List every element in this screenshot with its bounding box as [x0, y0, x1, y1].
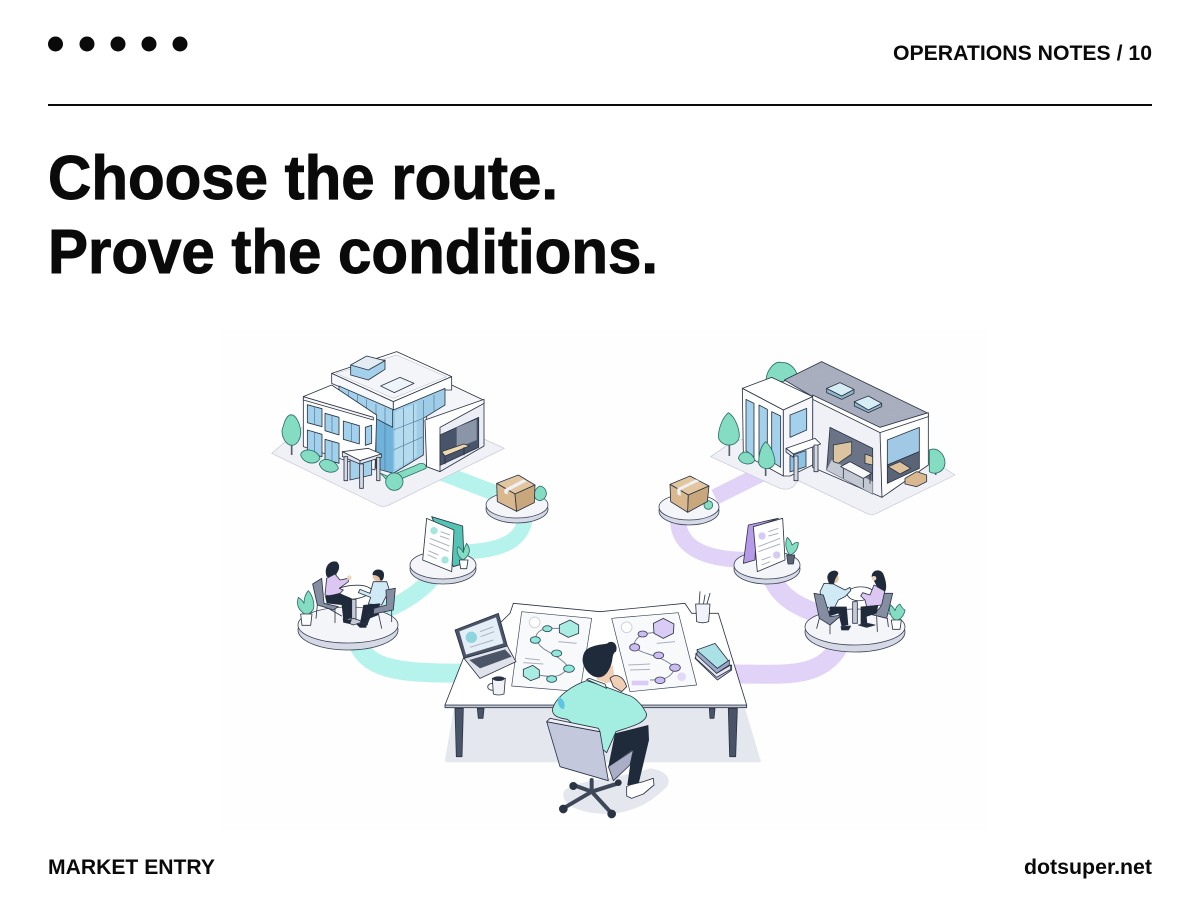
trees: [718, 413, 775, 476]
desk legs: [455, 708, 737, 757]
right shrub tree: [929, 449, 945, 475]
stacked books: [695, 643, 732, 680]
title: [48, 144, 658, 287]
sweater: [552, 681, 647, 753]
tree: [282, 415, 301, 455]
head: [597, 665, 615, 683]
footer label: right: dotsuper.net: [1024, 856, 1152, 879]
meeting: left table with two people: [297, 561, 395, 628]
footer label: left: MARKET ENTRY: [48, 856, 215, 879]
illustration: two market entry routes: [272, 352, 955, 818]
desk top: [445, 705, 747, 708]
office block: [742, 377, 813, 410]
coffee mug: [488, 676, 505, 695]
title: Choose the route.: [48, 144, 558, 213]
building: right warehouse: [711, 362, 955, 515]
platform: left meeting: [298, 607, 398, 650]
icon: left document stand: [423, 517, 469, 572]
trousers: [608, 725, 649, 785]
platform: right document: [734, 551, 800, 584]
table: [847, 587, 873, 623]
canopy: [786, 438, 821, 481]
icon: right document stand: [743, 518, 798, 572]
route: teal path: [356, 472, 526, 673]
title: Prove the conditions.: [48, 218, 658, 287]
pencil cup: [696, 592, 710, 623]
shrubs: [301, 450, 426, 490]
tree behind: [766, 362, 797, 382]
plant: [890, 604, 905, 629]
icon: five header dots: [48, 36, 188, 52]
header label: OPERATIONS NOTES / 10: [893, 42, 1152, 65]
woman: [325, 561, 352, 624]
shoe: [627, 778, 654, 798]
skylights: [827, 383, 882, 413]
floor shadow: [445, 708, 761, 762]
table: [333, 585, 372, 625]
glass tower: [376, 388, 445, 473]
upper block: [332, 352, 452, 402]
roller door and boxes: [887, 427, 927, 487]
platform: left document: [410, 551, 476, 584]
low right wing: [427, 385, 483, 423]
man: [814, 571, 851, 634]
desk scene with person: [445, 592, 761, 818]
roof skylight: [351, 356, 385, 380]
icon: left parcel box: [497, 475, 546, 511]
warehouse shell: [813, 398, 882, 497]
woman chair: [313, 578, 338, 610]
chair shadow: [563, 768, 669, 814]
platform: left box: [486, 492, 548, 523]
map: teal route: [512, 612, 592, 692]
icon: right parcel box: [670, 476, 713, 512]
laptop: [455, 613, 516, 678]
building: left office: [272, 352, 504, 507]
chair: [547, 722, 608, 781]
person: [547, 642, 654, 818]
platform: right box: [659, 494, 719, 525]
collar: [587, 678, 607, 688]
meeting: right table with two people: [814, 570, 905, 634]
route: lilac path: [678, 472, 842, 674]
plant: [297, 591, 314, 625]
platform: right meeting: [805, 609, 905, 652]
man: [357, 569, 395, 628]
woman: [858, 570, 893, 632]
upper window strip: [339, 386, 393, 427]
entrance canopy: [342, 448, 381, 488]
left wing: [303, 385, 377, 470]
map: lilac route: [612, 613, 697, 692]
chair base: [563, 780, 618, 813]
open bay with desk: [827, 427, 873, 494]
